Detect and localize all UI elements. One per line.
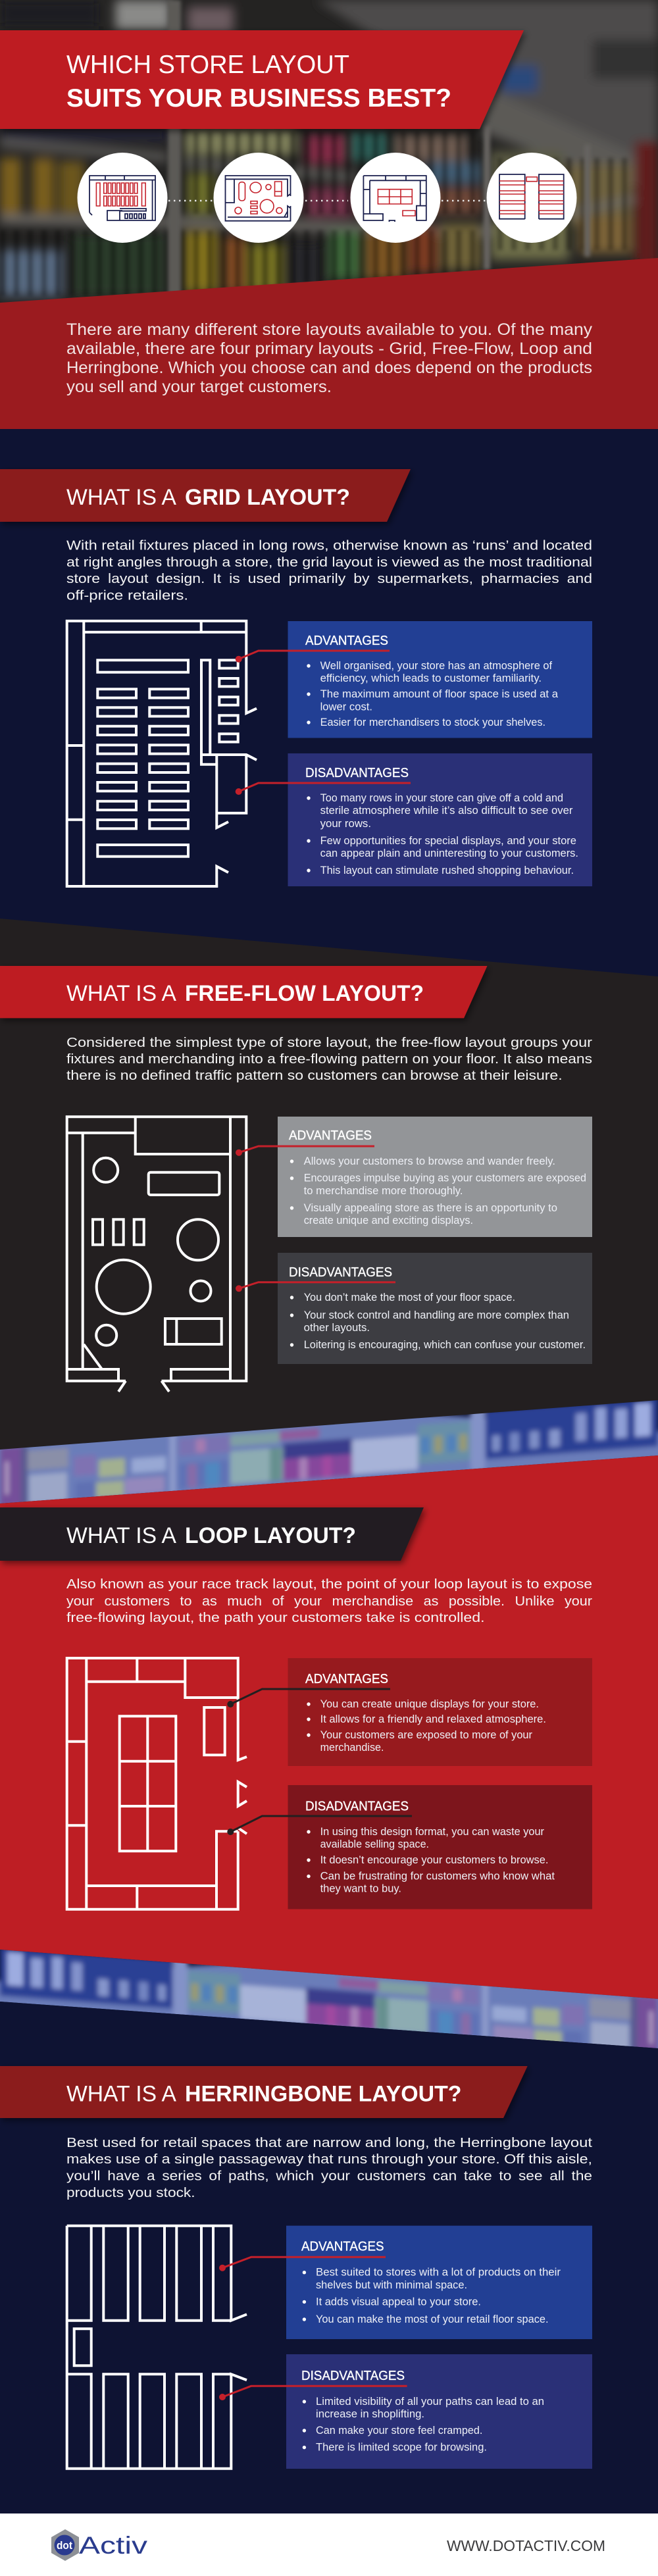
panel: free-flow advantages: Encourages impulse buying as your customers are exposed [304, 1173, 586, 1184]
panel: herringbone advantages: shelves but with minimal space. [316, 2279, 467, 2291]
panel: grid disadvantages: sterile atmosphere while it’s also difficult to see over [320, 805, 573, 817]
heading: grid layout [0, 469, 411, 522]
logo: dotActiv: dot [57, 2539, 72, 2552]
heading: grid layout: GRID LAYOUT? [185, 485, 350, 510]
chart: herringbone floor plan [67, 2226, 247, 2469]
panel: free-flow disadvantages: other layouts. [304, 1322, 370, 1334]
heading: loop layout: LOOP LAYOUT? [185, 1523, 356, 1548]
text: herringbone description: makes use of a single passageway that runs through your store. Off this aisle, [66, 2152, 592, 2167]
heading: loop layout: WHAT IS A [66, 1523, 176, 1548]
panel: loop disadvantages: they want to buy. [320, 1883, 401, 1895]
panel: free-flow disadvantages: You don’t make the most of your floor space. [304, 1292, 515, 1303]
panel: herringbone advantages [286, 2226, 592, 2339]
panel: free-flow disadvantages: DISADVANTAGES [289, 1265, 392, 1280]
title banner [0, 30, 524, 129]
logo: dotActiv: Activ [79, 2532, 148, 2559]
text: loop description: your customers to as much of your merchandise as possible. Unlike your [66, 1594, 592, 1609]
website address: WWW.DOTACTIV.COM [447, 2537, 605, 2554]
panel: loop advantages: ADVANTAGES [305, 1672, 388, 1686]
callout lines: grid [236, 651, 411, 794]
panel: herringbone disadvantages: Limited visibility of all your paths can lead to an [316, 2396, 544, 2408]
panel: free-flow advantages: create unique and exciting displays. [304, 1215, 473, 1226]
section: loop layout [0, 1455, 658, 1999]
heading: grid layout: WHAT IS A [66, 485, 176, 510]
heading: free-flow layout: WHAT IS A [66, 981, 176, 1006]
heading: free-flow layout: FREE-FLOW LAYOUT? [185, 981, 424, 1006]
panel: introduction: There are many different store layouts available to you. Of the many [66, 320, 593, 339]
panel: grid advantages: lower cost. [320, 701, 372, 713]
text: grid description: at right angles through a store, the grid layout is viewed as the most traditional [66, 555, 592, 570]
panel: free-flow advantages [278, 1117, 592, 1237]
panel: introduction: you sell and your target customers. [66, 378, 332, 396]
callout lines: loop [228, 1689, 412, 1834]
panel: grid disadvantages: This layout can stimulate rushed shopping behaviour. [320, 865, 574, 876]
title banner: WHICH STORE LAYOUT [66, 51, 349, 79]
heading: herringbone layout: HERRINGBONE LAYOUT? [185, 2081, 462, 2106]
panel: introduction: available, there are four primary layouts - Grid, Free-Flow, Loop and [66, 340, 592, 358]
text: herringbone description: you’ll have a series of paths, which your customers can take to see all the [66, 2169, 592, 2184]
panel: introduction: Herringbone. Which you choose can and does depend on the products [66, 359, 592, 377]
logo: dotActiv [51, 2529, 148, 2561]
panel: herringbone disadvantages: DISADVANTAGES [301, 2369, 405, 2383]
icon: free-flow layout thumbnail [213, 153, 304, 243]
panel: free-flow advantages: to merchandise more thoroughly. [304, 1185, 463, 1197]
text: grid description: With retail fixtures placed in long rows, otherwise known as ‘runs’ and located [66, 538, 592, 553]
panel: herringbone advantages: ADVANTAGES [301, 2240, 384, 2254]
panel: herringbone disadvantages: Can make your store feel cramped. [316, 2425, 482, 2437]
panel: grid disadvantages [288, 753, 592, 886]
text: loop description: free-flowing layout, the path your customers take is controlled. [66, 1610, 485, 1625]
panel: introduction [0, 258, 658, 429]
panel: grid advantages: Well organised, your store has an atmosphere of [320, 660, 552, 672]
panel: herringbone disadvantages: increase in shoplifting. [316, 2408, 424, 2420]
panel: grid disadvantages: Too many rows in your store can give off a cold and [320, 792, 563, 804]
text: herringbone description: Best used for retail spaces that are narrow and long, the Herringbone layout [66, 2135, 592, 2150]
text: herringbone description: products you stock. [66, 2185, 195, 2200]
panel: grid advantages: ADVANTAGES [305, 634, 388, 648]
heading: free-flow layout [0, 966, 487, 1018]
callout lines: free-flow [237, 1146, 395, 1291]
panel: free-flow advantages: Allows your customers to browse and wander freely. [304, 1155, 555, 1167]
panel: grid disadvantages: your rows. [320, 818, 371, 830]
panel: free-flow disadvantages [278, 1253, 592, 1364]
panel: grid advantages: efficiency, which leads to customer familiarity. [320, 672, 542, 684]
photo strip: blue-tinted shelves, mirrored [0, 1950, 658, 2048]
icon: loop layout thumbnail [350, 153, 441, 243]
panel: grid disadvantages: DISADVANTAGES [305, 766, 409, 780]
panel: loop disadvantages: DISADVANTAGES [305, 1799, 409, 1813]
icon: herringbone layout thumbnail [487, 153, 576, 243]
panel: loop disadvantages: It doesn’t encourage your customers to browse. [320, 1854, 549, 1866]
dotted connectors between layout icons [168, 200, 486, 201]
text: free-flow description: there is no defined traffic pattern so customers can browse at their leisure. [66, 1068, 563, 1083]
text: loop description: Also known as your race track layout, the point of your loop layout is to expose [66, 1577, 592, 1592]
panel: grid advantages [288, 621, 592, 738]
icon: grid layout thumbnail [78, 153, 167, 243]
panel: free-flow disadvantages: Loitering is encouraging, which can confuse your customer. [304, 1339, 586, 1351]
footer [0, 2513, 658, 2576]
title banner: SUITS YOUR BUSINESS BEST? [66, 84, 451, 113]
panel: loop advantages: merchandise. [320, 1742, 384, 1754]
panel: loop disadvantages: Can be frustrating for customers who know what [320, 1871, 555, 1882]
panel: herringbone disadvantages [286, 2354, 592, 2469]
section: herringbone layout [0, 2002, 658, 2513]
heading: herringbone layout [0, 2066, 528, 2118]
text: herringbone description [66, 2135, 592, 2200]
panel: loop advantages: You can create unique displays for your store. [320, 1698, 539, 1710]
header photo: blurred supermarket shelves [0, 0, 658, 309]
chart: loop floor plan [67, 1658, 247, 1909]
panel: herringbone advantages: Best suited to stores with a lot of products on their [316, 2267, 561, 2279]
text: grid description: store layout design. It is used primarily by supermarkets, pharmacies and [66, 571, 592, 586]
text: free-flow description: fixtures and merchanding into a free-flowing pattern on your floor. It also means [66, 1051, 592, 1067]
panel: loop advantages: Your customers are exposed to more of your [320, 1729, 532, 1741]
panel: grid disadvantages: Few opportunities for special displays, and your store [320, 835, 576, 847]
chart: free-flow floor plan [67, 1117, 246, 1392]
bottle texture inside the shelf rows [0, 132, 635, 296]
text: free-flow description [66, 1035, 592, 1083]
panel: herringbone disadvantages: There is limited scope for browsing. [316, 2442, 487, 2454]
panel: free-flow disadvantages: Your stock control and handling are more complex than [304, 1309, 569, 1321]
section: grid layout [0, 429, 658, 955]
text: loop description [66, 1577, 592, 1625]
panel: loop disadvantages: available selling space. [320, 1838, 429, 1850]
text: free-flow description: Considered the simplest type of store layout, the free-flow layout groups your [66, 1035, 592, 1050]
heading: herringbone layout: WHAT IS A [66, 2081, 176, 2106]
panel: free-flow advantages: ADVANTAGES [289, 1128, 372, 1143]
panel: free-flow advantages: Visually appealing store as there is an opportunity to [304, 1202, 557, 1214]
panel: herringbone advantages: It adds visual appeal to your store. [316, 2296, 481, 2308]
text: grid description: off-price retailers. [66, 588, 188, 603]
panel: grid advantages: Easier for merchandisers to stock your shelves. [320, 717, 545, 728]
panel: grid disadvantages: can appear plain and uninteresting to your customers. [320, 847, 578, 859]
panel: loop advantages [288, 1658, 592, 1766]
section: free-flow layout [0, 919, 658, 1450]
panel: loop disadvantages: In using this design format, you can waste your [320, 1826, 544, 1838]
panel: loop disadvantages [288, 1785, 592, 1909]
heading: loop layout [0, 1507, 424, 1561]
photo strip: blue-tinted shelves [0, 1400, 658, 1503]
panel: grid advantages: The maximum amount of floor space is used at a [320, 688, 559, 700]
text: grid description [66, 538, 592, 603]
callout lines: herringbone [220, 2257, 407, 2399]
chart: grid floor plan [67, 621, 257, 886]
panel: loop advantages: It allows for a friendly and relaxed atmosphere. [320, 1713, 546, 1725]
panel: herringbone advantages: You can make the most of your retail floor space. [316, 2313, 549, 2325]
